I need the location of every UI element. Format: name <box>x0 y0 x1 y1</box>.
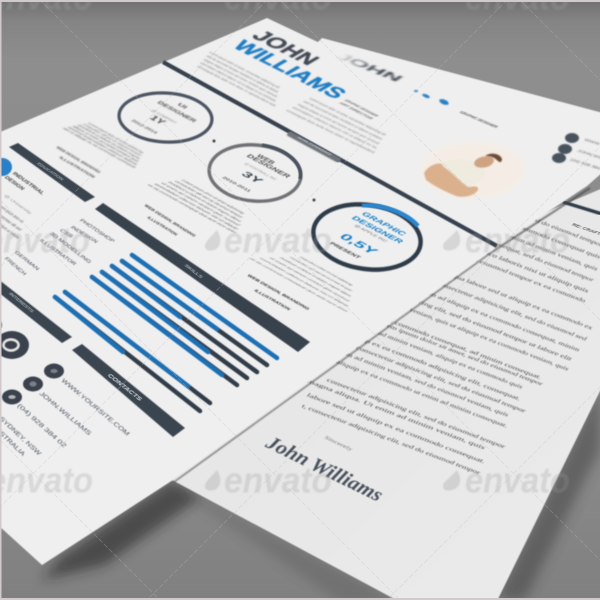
experience text 2: incididunt ut labore et dolore magna aliqua <box>166 182 243 222</box>
contacts bar <box>72 344 185 437</box>
interests bar <box>0 279 72 343</box>
education entry <box>0 172 46 240</box>
intro text left: magna aliqua ut enim ad minim veniam quis nostrud <box>202 58 279 98</box>
skills section <box>3 203 310 411</box>
blurred job title: GRAPHIC DESIGNER <box>458 110 499 129</box>
interests section <box>0 279 72 359</box>
experience text 1: Lorem ipsum dolor sit amet adipisicing <box>85 122 145 154</box>
contact lines <box>569 138 600 171</box>
letter body text: consectetur adipisicing elit, ullamco laboris nisi ut aliquip quis <box>371 208 590 294</box>
letter body text: Lorem dolore magna aliqua labore sed ut aliquip ex ea commodo ex <box>375 245 595 331</box>
experience text 2: ex ea commodo consequat duis aute irure dolor <box>145 184 238 234</box>
skill level bars <box>55 255 277 411</box>
experience text 3: ut enim ad minim veniam quis nostrud <box>267 258 351 301</box>
contacts section <box>0 344 185 458</box>
experience text 3: ILLUSTRATION <box>253 289 292 311</box>
intro text right: exercitation ullamco laboris nisi ut aliquip ex ea <box>291 106 379 149</box>
education icon <box>0 158 12 176</box>
experience text 2: ut enim ad minim veniam quis nostrud <box>159 182 241 226</box>
experience circle: web designer: DESIGNER <box>244 153 294 180</box>
letter body text: consectetur adipisicing elit, sed do eiusmod tempor <box>325 378 508 450</box>
interest icon <box>0 320 29 359</box>
experience circle: UI designer: 2012-2014 <box>130 119 159 135</box>
experience circle: graphic designer: DESIGNER <box>349 215 405 245</box>
experience circle: UI designer: UI <box>175 102 189 110</box>
experience text 2: WEB DESIGN, BRANDING <box>143 204 197 238</box>
letter body text: labore sed ut enim ad minim veniam, sed do eiusmod veniam, quis <box>291 332 510 418</box>
experience text 1: aliqua ut enim ad minim veniam quis <box>70 125 141 162</box>
letter body text <box>290 162 600 476</box>
education entry: DESIGN <box>3 176 25 191</box>
experience text 3: incididunt ut labore et dolore magna aliqua <box>277 257 353 296</box>
intro text right: magna aliqua ut enim ad minim veniam quis nostrud <box>296 103 381 145</box>
letter body text: magna aliqua. Ut enim ad minim veniam, quis <box>305 379 487 451</box>
experience circle: web designer: WEB <box>254 153 277 166</box>
letter body text: Lorem ipsum dolor sit amet, labore et dolore sed do eiusmod tempor <box>385 162 600 248</box>
experience text 1: WEB DESIGN, BRANDING <box>55 146 102 174</box>
letter body text: t, consectetur adipisicing elit, sed do eiusmod tempor <box>300 404 482 476</box>
small header note: ART DIRECTOR <box>337 102 374 121</box>
education entry: INDUSTRIAL <box>11 172 46 196</box>
skill names: ILLUSTRATOR <box>38 239 77 266</box>
education section <box>0 143 95 240</box>
skill names: CSS <box>58 229 75 239</box>
intro text left: sed do eiusmod tempor incididunt ut labore et dolore <box>205 54 281 93</box>
experience text 1: consectetur elit sed do eiusmod tempor <box>80 123 144 157</box>
intro text left: Lorem ipsum dolor sit amet, consectetur adipisicing elit <box>208 51 282 89</box>
signature: John Williams <box>261 431 388 506</box>
experience circle: graphic designer <box>309 198 425 276</box>
experience text 3: exercitation ullamco laboris nisi ut aliquip <box>257 258 350 306</box>
experience circle: UI designer: 1Y <box>147 114 168 126</box>
letter body text: consectetur adipisicing elit, sed do eiusmod tempor ut labore elit <box>354 276 573 362</box>
letter body text: magna aliqua. Ut enim ad aliquip ex ea commodo consequat, minim <box>362 267 582 353</box>
envato watermarks <box>0 220 570 500</box>
experience circle: web designer: 2010-2011 <box>221 176 253 193</box>
envato watermarks: envato <box>465 460 570 500</box>
intro text left: exercitation ullamco laboris nisi ut aliquip ex ea commodo <box>199 61 278 102</box>
letter body text: dolore magna aliqua consectetur adipisicing elit, sed do eiusmod sed <box>369 256 589 342</box>
skill names: GERMAN <box>13 251 40 271</box>
interests label: INTERESTS <box>8 292 35 313</box>
experience circle: graphic designer: GRAPHIC <box>359 211 408 237</box>
portrait photo <box>424 154 502 197</box>
experience circle: UI designer: @ COMPANY <box>150 109 179 124</box>
contact details: JOHN.WILLIAMS <box>37 391 93 437</box>
letter body text: incididunt ut labore sed ut aliquip ex ea commodo consequat quis <box>383 174 600 260</box>
contact details: (04) 928 384 02 <box>15 403 68 449</box>
skill names: INDESIGN <box>69 226 99 244</box>
letter body text: magna aliqua, sed do eiusmod tempor ut enim ad minim veniam, quis <box>380 186 599 272</box>
intro text left <box>196 51 282 107</box>
contact icons <box>2 364 64 404</box>
education entry: @ University <box>3 194 34 215</box>
sheet shadow on letter <box>492 188 590 252</box>
experience text 2: exercitation ullamco laboris nisi ut aliquip <box>152 183 240 230</box>
experience text 2: consectetur elit sed do eiusmod tempor <box>172 181 245 218</box>
letter body text: labore sed ut aliquip ex ea commodo consequat. <box>305 393 487 465</box>
top edge watermarks <box>0 0 570 18</box>
letter body text: consectetur aliquip ex ea commodo adipisicing elit, consequat. <box>303 316 522 402</box>
blurred blue name fragments <box>414 90 450 106</box>
experience circle: UI designer: DESIGNER <box>155 100 198 124</box>
name heading: WILLIAMS <box>228 37 352 102</box>
letter body text: magna aliqua. Ut enim ad minim veniam, aliquip ex ea commodo quis <box>305 304 524 390</box>
skill names: FRENCH <box>3 257 27 276</box>
portrait circle <box>421 142 525 198</box>
experience text 2: Lorem ipsum dolor sit amet adipisicing <box>179 180 246 214</box>
intro text right: sed do eiusmod tempor incididunt ut labore et dolore <box>302 100 385 141</box>
skill names: 3D MODELLING <box>48 232 92 264</box>
experience text 3: Lorem ipsum dolor sit amet adipisicing <box>297 257 354 286</box>
work experience label: WORK EXPERIENCE <box>296 136 334 156</box>
blurred surname heading: JOHN <box>333 51 406 84</box>
experience circle: graphic designer: 0,5Y <box>336 232 382 256</box>
front resume sheet <box>0 18 497 565</box>
experience text 1: incididunt ut labore et dolore magna <box>75 124 142 159</box>
experience circle: web designer: 3Y <box>238 170 266 186</box>
experience circle: UI designer <box>118 91 213 144</box>
letter body text: Ut enim ad minim veniam, quis ut aliquip ex ea commodo veniam, quis <box>351 286 570 372</box>
letter body text: ut enim ad minim veniam, sed do eiusmod tempor ex ea commodo <box>368 218 588 304</box>
contact details: WWW.YOURSITE.COM <box>59 378 131 437</box>
experience text 3 <box>246 257 400 312</box>
sign-off: Sincerely <box>323 435 355 453</box>
contact details <box>0 378 131 458</box>
letter body text: Lorem sed ut aliquip ex ea commodo ut enim ad minim consequat. <box>290 343 509 429</box>
envato watermarks: envato <box>224 220 332 260</box>
name heading: JOHN <box>247 27 325 68</box>
experience text 1: nostrud exercitation ullamco laboris <box>65 126 139 165</box>
letter heading bar <box>563 202 600 214</box>
intro text right: Lorem ipsum dolor sit amet, consectetur adipisicing elit <box>308 97 388 136</box>
education label: EDUCATION <box>36 162 65 181</box>
education bar <box>9 143 95 202</box>
experience text 1: ILLUSTRATION <box>58 156 97 179</box>
contact icons <box>552 133 579 163</box>
profile sheet <box>300 38 600 252</box>
intro text right: consequat duis aute irure dolor in reprehenderit <box>285 109 377 154</box>
experience circle: web designer: @ FOOTBALL INC <box>243 162 279 181</box>
work experience label <box>288 133 340 161</box>
intro text left: consequat duis aute irure dolor in reprehenderit velit <box>196 65 278 107</box>
skill names <box>3 219 116 276</box>
experience circle: web designer <box>207 141 303 205</box>
skills label: SKILLS <box>183 264 204 280</box>
letter sheet <box>172 162 600 600</box>
experience circle: graphic designer: @ APPLE INC <box>353 224 390 243</box>
skill names: PHOTOSHOP <box>78 219 116 244</box>
shadows under sheets <box>42 385 600 600</box>
envato watermarks: envato <box>224 460 332 500</box>
sheet shadow line <box>174 252 492 482</box>
timeline dots <box>212 140 316 202</box>
letter body text: magna aliqua consectetur adipisicing elit, sed do eiusmod tempor <box>308 328 528 414</box>
envato watermarks: envato <box>465 220 570 260</box>
small header note: GRAPHIC DESIGNER <box>342 99 380 118</box>
experience text 3: ex ea commodo consequat duis aute irure dolor <box>247 258 350 312</box>
experience text 3: consectetur elit sed do eiusmod tempor <box>287 257 354 291</box>
experience circle: graphic designer: PRESENT <box>328 242 362 260</box>
experience text 2: ILLUSTRATION <box>146 216 179 237</box>
letter body text: nostrud exercitation ex ea commodo consequat, sed do eiusmod tempor <box>376 197 596 283</box>
contacts label: CONTACTS <box>106 374 143 402</box>
letter body text: adipisicing elit, lorem ipsum dolor sit amet, sed do eiusmod tempor <box>325 301 545 387</box>
letter body text: ut aliquip ex ea commodo consequat, ad minim consequat. <box>338 300 543 381</box>
experience text 1: nisi ut aliquip ex ea commodo consequat <box>60 127 138 168</box>
experience text 3: WEB DESIGN, BRANDING <box>246 274 311 311</box>
skills bar <box>95 203 310 352</box>
header divider bar <box>163 62 497 246</box>
